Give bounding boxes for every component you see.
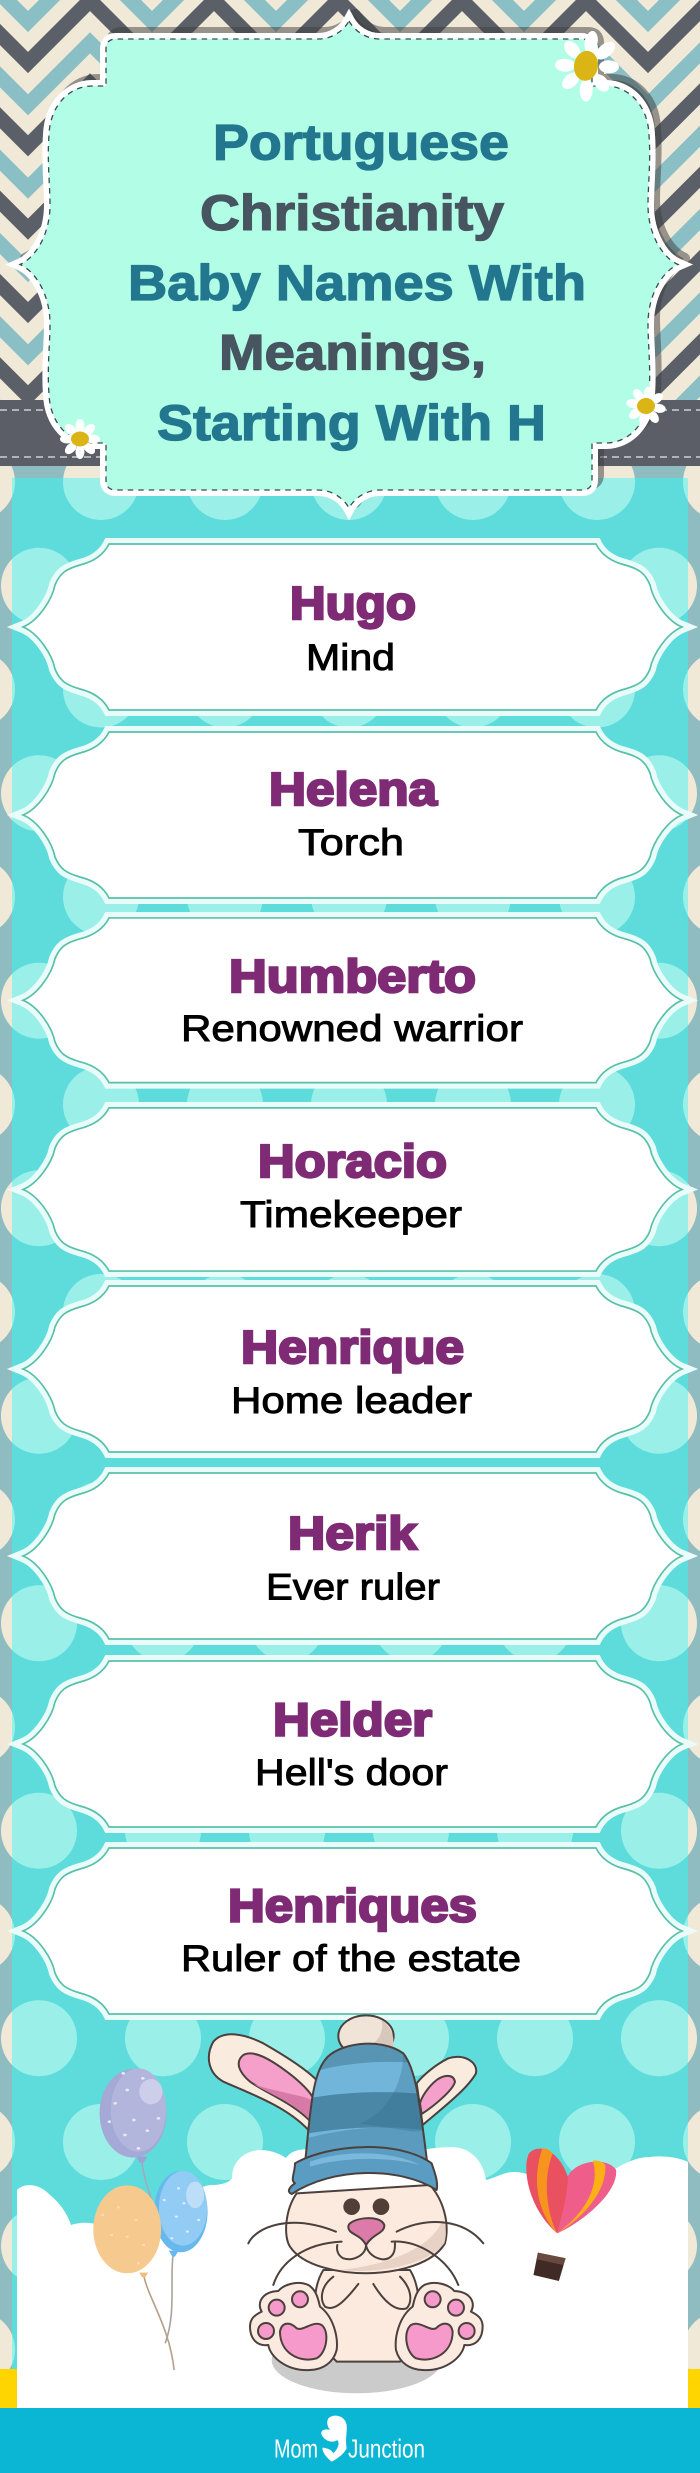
icon: daisy left bbox=[60, 419, 100, 459]
right foot bbox=[396, 2283, 483, 2370]
panel: Horacio bbox=[23, 1108, 682, 1271]
face bbox=[248, 2198, 483, 2285]
title text: Baby Names With bbox=[128, 255, 586, 311]
pompom bbox=[338, 2015, 394, 2057]
right ear bbox=[417, 2057, 476, 2125]
bunny shadow bbox=[272, 2327, 442, 2393]
icon: heart hot air balloon bbox=[526, 2148, 616, 2281]
panel: Henrique bbox=[23, 1286, 682, 1452]
title plaque bbox=[20, 15, 684, 508]
title text: Christianity bbox=[200, 185, 504, 241]
panel: Helder bbox=[23, 1661, 682, 1827]
panel: Herik bbox=[23, 1473, 682, 1639]
side accents bbox=[0, 2369, 700, 2408]
meaning: Renowned warrior: Renowned warrior bbox=[181, 1008, 523, 1049]
icon: logo figure bbox=[321, 2416, 347, 2462]
icon: blue balloon bbox=[154, 2171, 208, 2257]
name: Helder: Helder bbox=[273, 1694, 432, 1746]
logo wordmark: Mom bbox=[274, 2434, 318, 2464]
clouds bbox=[17, 2147, 688, 2408]
logo wordmark: Junction bbox=[348, 2434, 425, 2464]
body bbox=[315, 2270, 419, 2362]
meaning: Torch: Torch bbox=[298, 822, 404, 863]
logo wordmark bbox=[274, 2434, 425, 2464]
icon: purple balloon bbox=[100, 2068, 167, 2163]
meaning: Hell's door: Hell's door bbox=[255, 1752, 448, 1793]
meaning: Ever ruler: Ever ruler bbox=[266, 1566, 440, 1608]
title text: Starting With H bbox=[157, 395, 546, 451]
panel: Hugo bbox=[23, 544, 682, 710]
panel: Humberto bbox=[23, 918, 682, 1083]
icon: daisy top right bbox=[555, 30, 619, 102]
left foot bbox=[250, 2283, 337, 2370]
meaning: Ruler of the estate: Ruler of the estate bbox=[181, 1938, 521, 1979]
icon: orange balloon bbox=[93, 2185, 161, 2277]
hat bbox=[289, 2040, 437, 2194]
title text: Portuguese bbox=[213, 114, 509, 170]
panel: Henriques bbox=[23, 1848, 682, 2014]
icon: daisy right bbox=[626, 386, 666, 426]
name: Helena: Helena bbox=[269, 763, 437, 815]
name: Humberto: Humberto bbox=[229, 950, 476, 1002]
arms bbox=[322, 2277, 410, 2309]
name: Herik: Herik bbox=[288, 1507, 417, 1559]
name: Hugo: Hugo bbox=[290, 577, 416, 629]
left ear bbox=[209, 2034, 317, 2130]
title text bbox=[128, 114, 586, 451]
meaning: Timekeeper: Timekeeper bbox=[240, 1194, 462, 1235]
head bbox=[286, 2185, 447, 2273]
meaning: Home leader: Home leader bbox=[231, 1380, 472, 1421]
name: Henrique: Henrique bbox=[241, 1321, 464, 1373]
footer bar bbox=[0, 2408, 700, 2473]
logo bbox=[274, 2416, 425, 2464]
title text: Meanings, bbox=[219, 324, 486, 380]
name: Horacio: Horacio bbox=[258, 1135, 447, 1187]
panel: Helena bbox=[23, 732, 682, 898]
meaning: Mind: Mind bbox=[306, 637, 395, 678]
illustration: balloons bbox=[93, 2068, 208, 2370]
illustration: bunny in a striped hat bbox=[209, 2015, 483, 2393]
name: Henriques: Henriques bbox=[228, 1880, 477, 1932]
